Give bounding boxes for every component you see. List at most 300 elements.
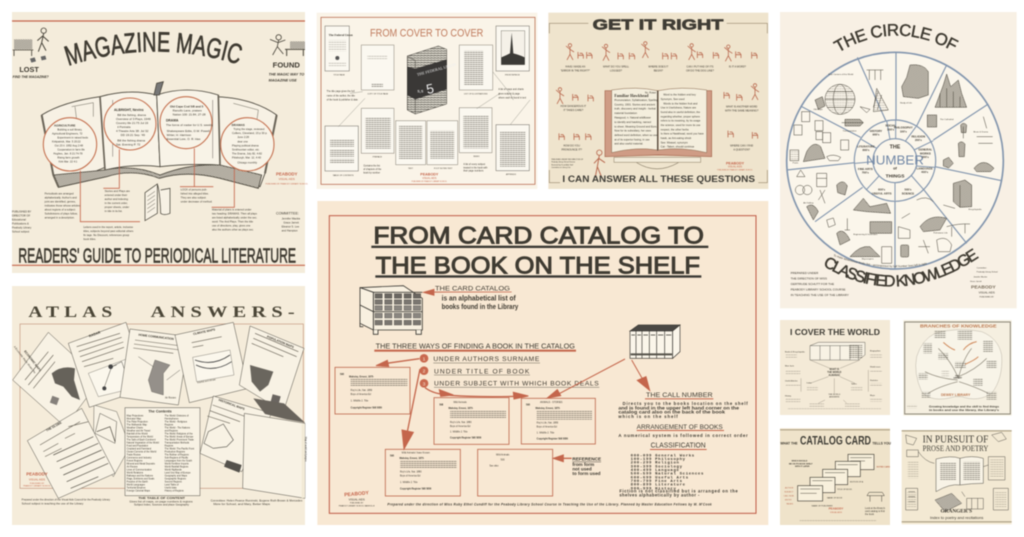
lens: agriculture entries: Oct 23 il. 1952 Aug 2:48	[55, 144, 84, 148]
table: classification numbers: 200-299 Religion	[631, 461, 680, 466]
page: the contents: Forest Regions	[127, 460, 143, 463]
text: call number: THE CALL NUMBER	[646, 392, 713, 399]
catalog card: author	[335, 367, 410, 414]
text: credits left	[791, 271, 849, 297]
text: side notes: A list of maps and charts	[498, 88, 525, 91]
text: side label blocks: Statistics	[870, 379, 878, 382]
text: note block centre: proper sheets, under	[105, 205, 129, 209]
illustration: open dictionary: to sheer, Meaning Ground and Eurs.	[614, 124, 657, 128]
page: contents	[459, 45, 493, 96]
page: the contents: The World - Religious	[165, 421, 188, 424]
catalog card: title: Copyright Register 598 5856	[450, 436, 482, 439]
text: top questions: WHAT DO YOU SPELL	[603, 66, 630, 69]
card: air communication: HOME COMMUNICATION	[138, 333, 174, 341]
text: note block centre right: They are also subject	[181, 196, 206, 200]
page: the contents: Languages from the South	[165, 460, 193, 463]
illustration: encyclopedia set	[810, 342, 865, 360]
card: air communication: Air Routes	[165, 396, 177, 399]
text: note block right: use of directions, play, gives one	[212, 224, 251, 228]
panel: Circle of Classified Knowledge poster	[780, 12, 1017, 308]
page: text: TEXT	[408, 168, 414, 170]
text: note block lower left: Letters used in the report, article, inclusive	[83, 225, 134, 229]
text: card annotations: EDITION OF A	[850, 480, 864, 483]
text: credit line	[800, 519, 876, 521]
lens: albright entries: ALBRIGHT, Nevins	[114, 108, 144, 112]
page: the contents: Territorial Empires	[127, 487, 146, 490]
text: note block centre right: under decrease of method.	[181, 200, 213, 204]
ring labels	[857, 124, 933, 195]
text: top questions: OR DO THE DOG LINE?	[686, 69, 714, 72]
logo: Peabody: VISUAL AIDS	[29, 478, 45, 482]
text: card annotations: WITH IT LATER	[795, 465, 810, 468]
lens: albright entries: Sat. Evening P. 72	[116, 142, 141, 146]
caption labels around wheel: Study of Life	[900, 101, 913, 104]
callout lines from lenses	[80, 148, 234, 222]
logo: Peabody: PEABODY	[26, 472, 48, 477]
page: the contents: Weather and Air Travel	[127, 430, 151, 433]
text: side notes: their page numbers	[463, 170, 484, 173]
table: classification numbers: 400-499 Language	[631, 469, 680, 473]
text: side questions: A QUESTION?	[733, 148, 751, 151]
caption labels around wheel: Engineering & Inventions	[853, 233, 877, 236]
card: radar	[68, 322, 147, 407]
text: credits left: PREPARED UNDER	[791, 271, 819, 275]
text: note block left: Subdivisions of plays follow,	[45, 212, 78, 216]
page: the contents: World Relations	[127, 472, 144, 475]
illustration: open dictionary: Words to the hidden fruit and	[663, 101, 698, 105]
catalog card: reference form	[478, 449, 553, 496]
page: title page	[325, 26, 353, 76]
page: the contents: Weather Charts	[127, 427, 144, 430]
page: the contents: Commerce and Industry	[127, 457, 152, 460]
page: the contents: World Fertilizer Imports	[165, 463, 190, 466]
text: card catalog definition: THE CARD CATALOG	[435, 285, 510, 292]
catalog card: wild animals i have known: 598	[390, 456, 395, 458]
lens: old Cape Cod entries: Writer, H. Harrison	[167, 133, 191, 137]
lens: drama entries: Smithsonian editor, etc.	[232, 148, 260, 152]
heading: three ways of finding a book: THE THREE WAYS OF FINDING A BOOK IN THE CATALOG	[376, 343, 575, 350]
text: credits	[551, 159, 583, 169]
heading: classification: CLASSIFICATION	[651, 441, 706, 450]
panel: Branches of Knowledge poster	[903, 320, 1012, 416]
card: climate maps	[175, 322, 248, 403]
connector lines	[338, 72, 530, 127]
illustration: open dictionary: Is there a Hawkhead, word you have	[661, 132, 704, 136]
ring labels: PHILOSOPHY	[894, 126, 913, 130]
page: the contents: Land Use Map of Europe	[165, 472, 191, 475]
illustration: open dictionary: Familiar Hawkhead	[614, 93, 649, 98]
text: top questions: CAN I PUT HAD OF ITS	[687, 66, 714, 69]
illustration: Federal Union book: THE FEDERAL UNION	[416, 62, 457, 77]
illustration: map wedge	[253, 398, 305, 423]
ring labels: 800's	[863, 148, 870, 152]
caption labels around wheel: Prehistoric Life	[933, 231, 948, 234]
panel: What the Catalog Card Tells You poster	[780, 428, 892, 525]
text: margin credit left: Peabody Library	[12, 226, 32, 230]
text: credits right: Jennifer Mackie	[973, 275, 988, 278]
page: the contents: The World: Religions of the	[165, 433, 193, 436]
page: the contents: The World: Prominent Trade	[165, 439, 195, 442]
illustration: tree of branches: LIBRARY	[953, 377, 963, 380]
page: the contents: The Mollweide Map	[127, 425, 148, 427]
text: note block right: Material of plans is entered under	[212, 208, 252, 212]
logo: Peabody: VISUAL AIDS	[728, 166, 743, 169]
icon: row of shelf books	[630, 325, 680, 358]
logo: Peabody	[717, 161, 753, 171]
page: frontispiece: FRONTISPIECE	[505, 74, 520, 76]
page: the contents: The Soils of Each Continent	[127, 439, 156, 442]
catalog card: subject: 1. Wildlife 2. Title	[537, 432, 555, 435]
table: classification numbers: 900-999 History	[631, 486, 677, 491]
page: the contents: The World: Areas of Europe	[165, 436, 194, 439]
table: classification numbers: 800-899 Literature	[631, 483, 686, 488]
card: economic map	[13, 332, 100, 427]
wheel chart	[787, 52, 1003, 269]
illustration: Federal Union book: s,s	[417, 89, 424, 94]
text: footer note: Growing knowledge and the skill to find things	[929, 405, 999, 409]
logo: Peabody: VISUAL AIDS	[422, 177, 437, 180]
sector: thinker statue and cathedral	[902, 65, 967, 127]
lens: drama entries: Chicago monthly	[237, 160, 258, 164]
ring labels: LITERATURE	[857, 144, 875, 148]
text: card annotations	[784, 461, 890, 508]
list: three catalog entries: UNDER SUBJECT WITH WHICH BOOK DEALS	[434, 381, 599, 388]
ring labels: HISTORY	[870, 129, 882, 133]
page: the contents: Sub-Regions of Pacific	[165, 458, 189, 460]
text: margin credit left: Publications &	[12, 222, 29, 226]
text: arc caption: To make adventurous books live—accompanied by half Number lives left to right	[834, 254, 927, 268]
page: the contents: Production Regions	[165, 451, 186, 454]
text: side questions: WITH THE SAME MEANING?	[725, 109, 759, 112]
text: committee credit	[276, 212, 301, 232]
text: committee credit: Grace Jarrett	[283, 220, 299, 224]
catalog card: title: Boys of America Ed	[450, 425, 471, 428]
text: centre callout: ANSWERS	[829, 396, 840, 399]
catalog card: subject	[521, 398, 595, 444]
text: card annotations: PAGES	[786, 502, 794, 505]
hub text: The Number of Things: THE	[890, 145, 901, 151]
caption labels around wheel	[793, 73, 989, 260]
lens: agriculture entries: Kirkpatrick, Mar. 5 20:22	[52, 140, 81, 144]
catalog card: title: 1. Wildlife 2. Title	[450, 430, 468, 433]
text: centre callout	[827, 368, 842, 399]
text: Lost caption: LOST	[19, 65, 39, 74]
logo: Peabody: PEABODY	[344, 490, 370, 498]
text: note block centre right	[181, 188, 213, 204]
logo: Peabody: PEABODY	[726, 161, 745, 165]
card: economic map: ECONOMIC MAPS	[23, 350, 42, 372]
text: top questions: "ERROR IN THE RIGHT?"	[561, 69, 590, 72]
page: the contents: Ocean Currents of the World	[127, 451, 157, 454]
title: The Book on the Shelf: THE BOOK ON THE SHELF	[376, 252, 700, 279]
text: call number: catalog card also on the back of the book	[618, 410, 726, 415]
text: side questions: IT TAKES CARE?	[563, 109, 584, 112]
page: copyright page	[361, 45, 394, 96]
text: side label blocks: Biographies	[870, 350, 880, 353]
logo: Peabody: PUBLISHED BY	[350, 502, 364, 504]
text: committee credit: and Hampton	[282, 228, 298, 232]
card: population maps	[239, 326, 304, 412]
text: side notes: The title page gives the full	[327, 90, 355, 93]
text: note block centre: in the current order,	[105, 201, 128, 205]
page: title page: The Federal Union	[329, 33, 353, 37]
lens: old Cape Cod entries: Ranulfo Lane, praises	[173, 108, 202, 112]
lens: old Cape Cod entries: DRAMA	[166, 118, 179, 122]
illustration: Federal Union book: 5	[425, 81, 435, 97]
catalog card: reference form: Wild Animals	[496, 454, 510, 457]
illustration: open dictionary	[605, 88, 712, 169]
illustration: open dictionary: and also useful material.	[614, 142, 643, 146]
panel: I Cover the World poster	[780, 320, 890, 415]
page: the contents: Hemispheres	[165, 418, 179, 421]
text: arrangement of books: A numerical system is followed in correct order	[618, 433, 748, 438]
text: side label blocks: History	[785, 395, 791, 398]
catalog card: author: Boys of America Ed	[351, 393, 372, 396]
text: footer note: in books and use the library, the Library's	[929, 408, 999, 412]
page: copyright page: COPY OF TITLE PAGE	[367, 93, 389, 96]
text: drawer note: Look at the library's	[865, 507, 886, 510]
text: fiction note: shelves alphabetically by author -	[619, 492, 700, 497]
catalog card: subject: Wahsley, Ernest, 1875-	[535, 407, 561, 410]
text: reference note: REFERENCE	[572, 457, 601, 462]
lens: old Cape Cod entries: Essential Lore, O. R. Has	[167, 137, 201, 141]
text: side label blocks: World news	[870, 366, 880, 369]
text: side questions: WHERE CAN I FIND	[730, 145, 753, 148]
page: frontispiece	[496, 26, 529, 76]
text: margin credit left: PUBLISHED BY	[12, 210, 32, 214]
text: reference note: from form	[572, 462, 594, 467]
page: the contents: World Rainfall Regions	[165, 466, 189, 469]
lens: drama entries	[221, 118, 274, 171]
text: note block lower left	[83, 225, 134, 241]
title: Catalog Card: WHAT THE	[780, 441, 798, 445]
text: note block centre right: LOCK of persons pub-	[181, 188, 207, 192]
hub text: The Number of Things	[866, 145, 924, 179]
lens: old Cape Cod entries: The forms of matter for U.S. weekly	[166, 123, 213, 127]
lens: agriculture entries: AGRICULTURE	[54, 124, 76, 128]
hub text: The Number of Things: NUMBER	[866, 152, 924, 167]
page: index: INDEX	[473, 156, 480, 158]
logo: Peabody: VISUAL AIDS	[349, 497, 365, 501]
text: card catalog definition: books found in the Library	[442, 304, 518, 311]
lens: drama entries: dear one	[237, 140, 248, 144]
icons: stick figures side rows	[556, 84, 759, 140]
text: side questions: HOW DO YOU	[563, 145, 580, 148]
caption labels around wheel: Skyscrapers	[862, 257, 874, 260]
catalog card: title	[434, 398, 509, 444]
text: top questions: LOGGED?	[610, 69, 623, 72]
caption labels around wheel: Encyclopedia	[969, 209, 982, 211]
text: spine caption	[302, 424, 307, 498]
text: card annotations: CALL NUM.	[784, 494, 795, 497]
lens: drama entries: Trying the stage, reviewed	[233, 127, 265, 131]
icon: small open magazine	[145, 184, 170, 221]
text: credits left: THE DIRECTION OF MISS	[791, 277, 827, 281]
page: the contents	[125, 408, 200, 496]
text: Granger's index caption: GRANGER'S	[940, 509, 972, 514]
page: the contents: The Rubber of Regions	[165, 454, 190, 457]
logo: Peabody: VISUAL AIDS	[830, 511, 843, 514]
text: note block centre: author and indexing	[105, 197, 129, 201]
text: side notes: book by number	[363, 171, 380, 174]
caption labels around wheel: Old Maps	[813, 109, 823, 111]
catalog card: title: Wild Animals	[453, 401, 467, 404]
ring labels: WORKS	[920, 151, 931, 155]
text: top questions: WHERE DOES IT	[648, 66, 669, 69]
text: margin credit left: School subject	[12, 230, 30, 234]
page: the contents: The Contents	[148, 409, 172, 413]
title: In Pursuit of Prose and Poetry: IN PURSUIT OF	[923, 433, 988, 445]
lens: drama entries: The Drama, July 82, 4-82	[232, 152, 262, 156]
illustration: open book	[42, 82, 277, 188]
logo: Peabody: PEABODY	[420, 173, 439, 177]
ring labels: 600's	[878, 188, 886, 192]
illustration: open dictionary: Country, 1901. Stories and ancient	[614, 102, 655, 106]
page: appendix	[496, 125, 529, 176]
title: I Cover the World: I COVER THE WORLD	[790, 328, 880, 337]
text: side label blocks: Useful Articles	[785, 380, 798, 383]
page: the contents: Map Projections	[127, 415, 144, 418]
card: globe detail behind	[93, 405, 130, 477]
diagram: cascade of catalog cards	[798, 454, 874, 501]
ring labels: 200's	[915, 138, 922, 142]
ring labels: 300's	[887, 127, 895, 131]
text: Lost caption: FIND THE MAGAZINE?	[13, 75, 49, 79]
text: reference note: not used	[572, 466, 592, 471]
caption labels around wheel: Four Corners of the World	[828, 73, 854, 76]
text: footer captions: School subject in teaching the use of the Library	[22, 502, 84, 505]
catalog card: wild animals i have known: Copyright Register 598 5856	[400, 488, 432, 491]
text: card annotations: NAME OF BOOK	[827, 496, 843, 499]
text: note block lower left: book titles.	[83, 237, 96, 241]
text: note block centre	[105, 189, 130, 213]
hub text: The Number of Things: of	[893, 165, 898, 170]
list: three catalog entries: 2	[423, 369, 426, 375]
text: credits right: Peabody Library School	[977, 271, 998, 274]
text: footer captions	[22, 496, 303, 507]
illustration: open dictionary: See: Weasel, synonym	[661, 140, 689, 144]
lens: old Cape Cod entries: Shakespeare Edits, O.W. Powell	[167, 129, 210, 133]
icon: pointing stick figure	[594, 150, 605, 177]
card: population maps: POPULATION MAPS	[266, 335, 294, 349]
page: the contents: Food and Population	[127, 445, 149, 448]
lens: albright entries: Bill the fishing, drama	[117, 113, 146, 117]
text: footer captions: Prepared under the direction of the Visual Aids Council for the Peabody Library	[22, 499, 111, 502]
text: Granger's index caption	[930, 509, 984, 520]
page: appendix: APPENDIX	[506, 173, 517, 176]
subtitle: I can answer all these questions: I CAN ANSWER ALL THESE QUESTIONS	[562, 174, 755, 184]
logo: Peabody: PUBLISHED BY	[30, 483, 45, 485]
illustration: open Granger's index	[936, 457, 983, 492]
text: side notes	[327, 88, 526, 174]
text: Found caption: THE MAGIC WAY TO	[269, 72, 304, 76]
catalog card: reference form: See also	[489, 466, 499, 468]
page: title page: TITLE PAGE	[333, 73, 345, 76]
page: the contents: Second Regions	[165, 482, 183, 484]
lens: albright entries: il Portraits	[117, 125, 131, 129]
illustration: open dictionary: Pronunciation, Syllabication, Spelling	[614, 98, 658, 102]
text: top questions: IS IT A WORD?	[729, 66, 747, 69]
text: centre callout: ALMANAC	[828, 374, 841, 377]
text: side label blocks: Main facts	[785, 365, 794, 368]
text: credit line: Prepared under the direction of Miss Ruby Ethel Cundiff for the Peabody Library School Course in Teaching the Use of the Library. Planned by Master Education Fellows by W. M'Cook	[387, 502, 712, 506]
logo: Peabody: PUBLISHED BY PEABODY LIBRARY SCHOOL	[717, 168, 753, 171]
illustration: open dictionary: truth, discovery and insight - herbal	[614, 107, 656, 111]
illustration: open dictionary: respect, the other herbs	[661, 127, 689, 131]
text: call number	[617, 392, 748, 419]
text: drawer note: the book	[865, 513, 875, 516]
page: the contents: History of Regions	[165, 490, 185, 493]
page: bibliography	[427, 121, 458, 170]
text: Found caption	[269, 61, 304, 82]
logo: Peabody: PUBLISHED BY	[979, 296, 995, 298]
title: Atlas Answers	[28, 304, 300, 321]
text: side label blocks: Maps	[870, 395, 875, 397]
lens: albright entries	[104, 98, 156, 150]
text: note block left: indicates those whose articles	[45, 204, 81, 208]
logo: Peabody: PEABODY	[829, 507, 843, 511]
ring labels: USEFUL ARTS	[872, 191, 892, 195]
title: Atlas Answers: ATLAS	[28, 304, 117, 321]
text: side notes: name of the author, the title	[327, 94, 356, 97]
title: Classified Knowledge: CLASSIFIED KNOWLEDGE	[824, 248, 980, 288]
ring labels: SCIENCE	[902, 191, 914, 195]
page: the contents: The World: The Pacific Front	[165, 448, 195, 451]
text: spine caption: Map of world and pages	[304, 437, 307, 462]
lens: albright entries: DD 19:21 Sep. '49	[121, 133, 145, 137]
text: note block centre: in title in its list.	[105, 209, 123, 213]
text: side label blocks: Tables	[851, 383, 857, 385]
page: the contents: Regions	[165, 446, 174, 448]
text: top questions	[561, 66, 747, 72]
catalog card: wild animals i have known	[385, 449, 460, 496]
page: the contents: The World - The Nations	[165, 427, 191, 430]
title: Catalog Card: TELLS YOU	[872, 441, 892, 445]
ring labels: 900's	[873, 133, 880, 137]
illustration: open dictionary: defined word definition, when so use	[614, 133, 658, 137]
logo: Peabody: VISUAL AIDS	[979, 290, 995, 294]
text: credits right: Committee:	[977, 266, 987, 269]
text: footer captions: Subject Index, Sources and place Geography	[134, 504, 190, 507]
ring labels: 400's	[921, 170, 929, 174]
text: drawer note: card catalog to find	[865, 510, 885, 513]
ring labels: 100's	[900, 129, 907, 133]
text: footer captions: Gives list of maps, on page numbers & regions	[129, 500, 194, 503]
page: the contents: Regions	[165, 425, 174, 427]
page: the contents: Natural Vegetation of the World	[127, 442, 160, 445]
title: The Circle Of: THE CIRCLE OF	[832, 23, 960, 52]
title: Magazine Magic: MAGAZINE MAGIC	[63, 31, 243, 66]
lens: albright entries: Country life 21:75 Jul 19	[116, 121, 149, 125]
page: the contents: Geographic Regions	[165, 478, 187, 481]
icon: found figure with full shelf	[270, 35, 305, 56]
text: arrangement of books	[618, 424, 748, 438]
catalog card: author: 1. Wildlife 2. Title	[351, 400, 369, 403]
ring labels: LANGUAGE	[917, 166, 933, 170]
card: climate maps: CLIMATE MAPS	[193, 327, 216, 336]
text: credits left: GERTRUDE SCHUTT FOR THE	[791, 282, 834, 286]
text: credits: PUBLISHED UNDER THE DIRECTION OF	[551, 159, 583, 161]
text: side questions: WHAT IS ANOTHER WORD	[726, 105, 758, 108]
ring labels: 500's	[905, 188, 912, 192]
catalog card: author: Wahsley, Ernest, 1875-	[349, 376, 374, 379]
page: table of contents: TABLE OF CONTENTS	[333, 174, 354, 177]
page: bibliography: FOOT NOTES TEXT	[434, 168, 453, 170]
logo: Peabody: PEABODY	[276, 172, 297, 177]
title: Atlas Answers: ANSWERS-	[151, 304, 300, 321]
page: text	[396, 121, 426, 170]
page: contents: LIST OF ILLUSTRATIONS	[464, 93, 488, 96]
